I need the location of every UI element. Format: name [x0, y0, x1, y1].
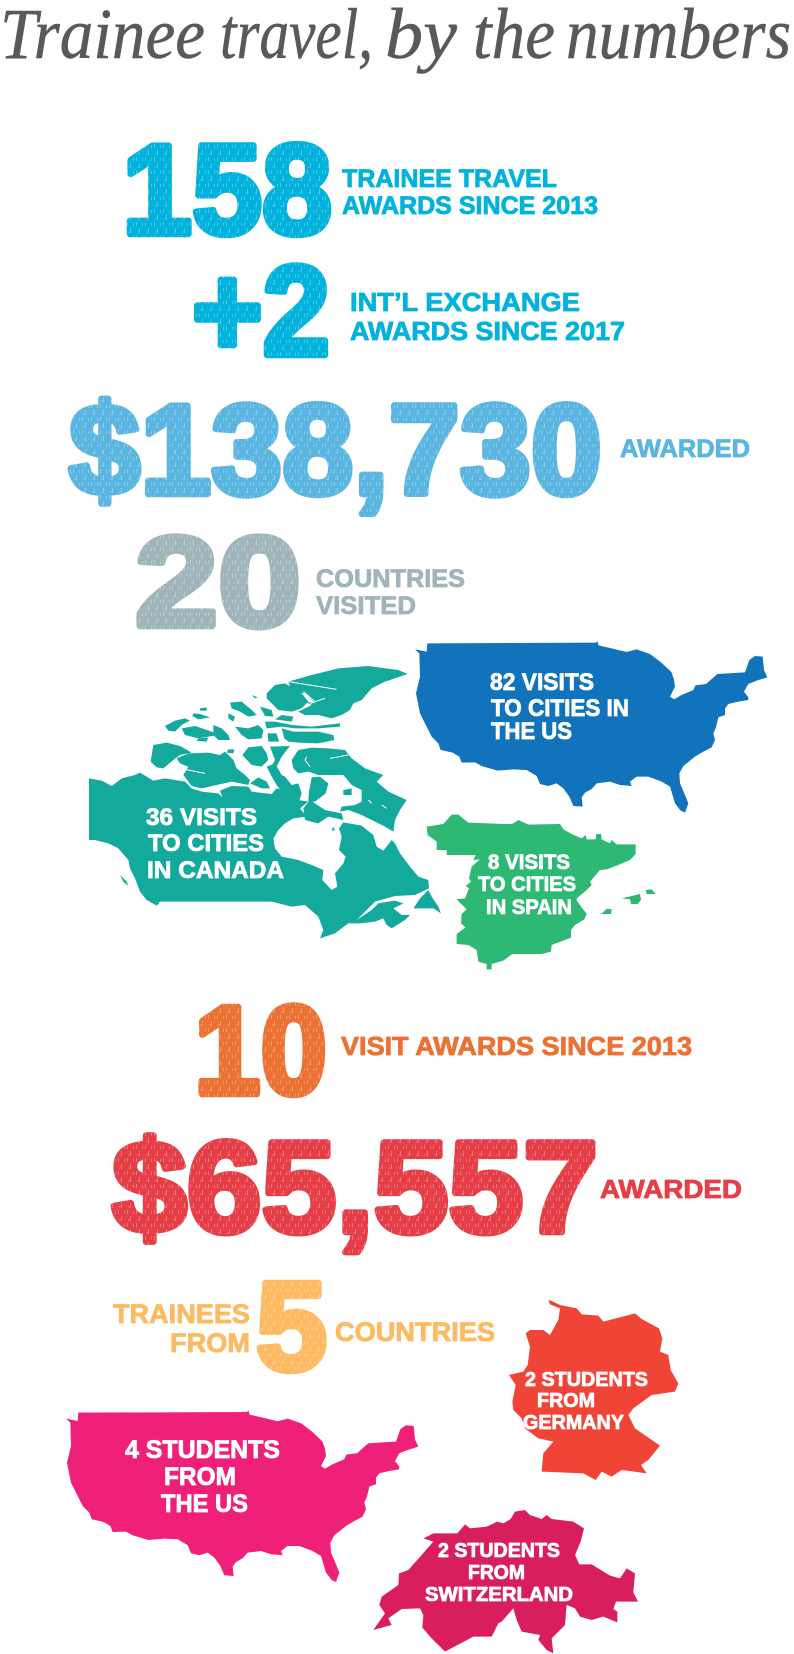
label: trainees from: FROM [170, 1328, 250, 1358]
label: Germany students: GERMANY [523, 1412, 625, 1434]
label: US students: FROM [164, 1463, 236, 1491]
label: trainee travel awards: AWARDS SINCE 2013 [342, 192, 598, 220]
label: countries visited [316, 565, 465, 620]
label: Germany students [523, 1369, 648, 1434]
stat: $138,730 awarded [67, 396, 750, 517]
label: US students: 4 STUDENTS [125, 1436, 280, 1464]
label: Canada visits [146, 804, 284, 884]
label: exchange awards [350, 287, 625, 346]
numeral $138,730: $138,730 [69, 379, 602, 522]
title [0, 0, 791, 74]
stat: 20 countries visited [136, 533, 464, 630]
map: Germany [509, 1300, 678, 1480]
label: Spain visits: 8 VISITS [488, 851, 570, 874]
map: Spain [427, 815, 656, 969]
label: exchange awards: INT’L EXCHANGE [350, 287, 580, 317]
label: countries: COUNTRIES [335, 1317, 495, 1347]
label: awarded: AWARDED [600, 1174, 742, 1204]
label: Switzerland students: SWITZERLAND [425, 1584, 573, 1606]
label: Switzerland students [425, 1540, 573, 1606]
label: trainee travel awards [342, 165, 598, 220]
label: Canada visits: TO CITIES [148, 830, 264, 857]
label: trainees from: TRAINEES [113, 1299, 250, 1329]
map: Switzerland [373, 1510, 638, 1653]
stat: +2 exchange awards [194, 262, 624, 358]
label: trainees from [113, 1299, 250, 1358]
label: trainee travel awards: TRAINEE TRAVEL [342, 165, 557, 193]
map: United States (students) [66, 1410, 418, 1582]
numeral $65,557: $65,557 [112, 1114, 598, 1260]
map: Canada [89, 666, 441, 938]
label: US visits: TO CITIES IN [491, 695, 629, 722]
numeral 5: 5 [256, 1256, 327, 1397]
label: countries visited: COUNTRIES [316, 565, 465, 593]
label: US visits: THE US [491, 718, 572, 745]
label: visit awards: VISIT AWARDS SINCE 2013 [341, 1031, 692, 1061]
label: Germany students: 2 STUDENTS [525, 1369, 648, 1391]
stat: trainees from 5 countries [112, 1280, 494, 1374]
label: Spain visits [478, 851, 576, 919]
label: Canada visits: 36 VISITS [146, 804, 257, 831]
label: US visits: 82 VISITS [490, 669, 594, 696]
label: US students [125, 1436, 280, 1518]
numeral 158: 158 [122, 119, 332, 262]
label: Germany students: FROM [537, 1390, 595, 1412]
stat: 10 visit awards [198, 1002, 692, 1098]
label: Canada visits: IN CANADA [147, 857, 284, 884]
label: Spain visits: TO CITIES [478, 873, 576, 896]
label: countries visited: VISITED [316, 592, 416, 620]
numeral +2: +2 [192, 240, 330, 383]
numeral 10: 10 [194, 980, 327, 1121]
label: Spain visits: IN SPAIN [486, 896, 572, 919]
label: US visits [490, 669, 629, 745]
label: awarded: AWARDED [620, 435, 750, 463]
map: United States (visits) [415, 641, 767, 813]
label: Switzerland students: 2 STUDENTS [438, 1540, 560, 1562]
label: Switzerland students: FROM [468, 1562, 525, 1584]
label: US students: THE US [161, 1490, 248, 1518]
label: exchange awards: AWARDS SINCE 2017 [350, 316, 625, 346]
stat: $65,557 awarded [110, 1132, 742, 1256]
stat: 158 trainee travel awards [126, 140, 598, 238]
numeral 20: 20 [135, 511, 301, 654]
